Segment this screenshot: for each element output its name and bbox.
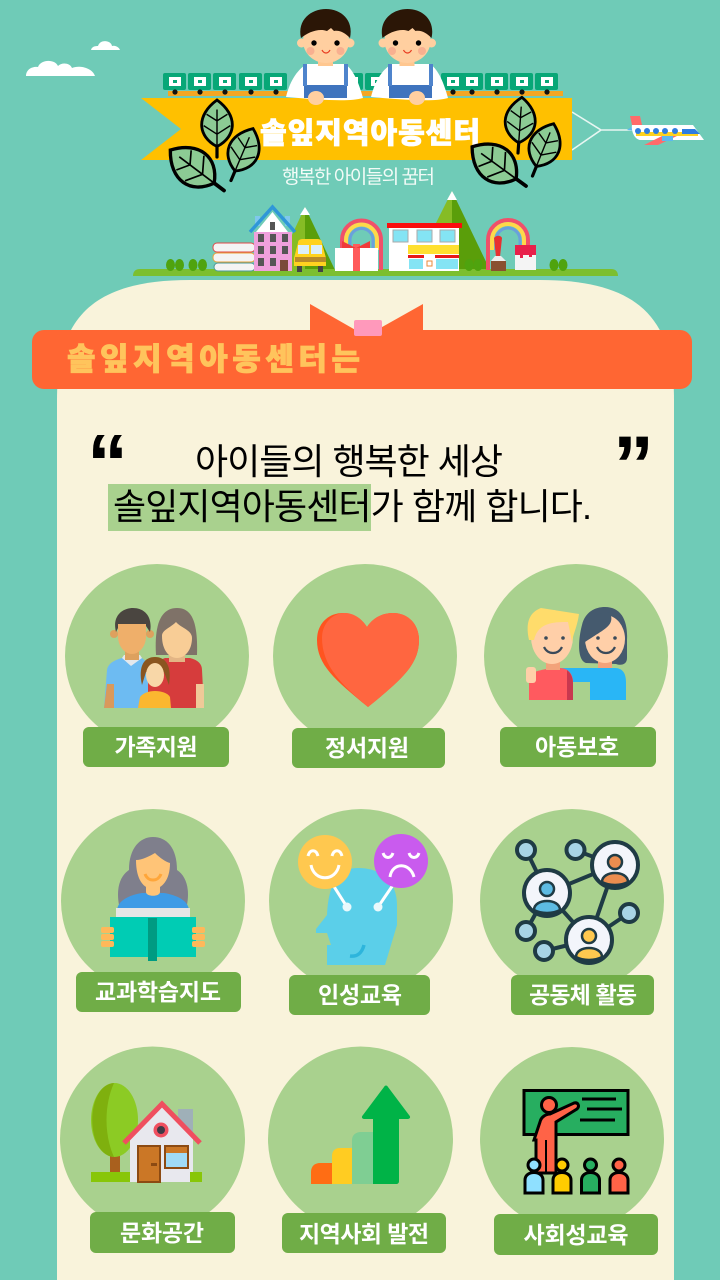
quote line 1: 아이들의 행복한 세상 [195,441,503,482]
label box [500,727,656,767]
label box [76,972,241,1012]
sad face [374,834,428,888]
school building [387,223,462,271]
leaves right [462,96,568,200]
item: community activity [480,809,664,1015]
icon: two friends [526,607,627,700]
ground [133,269,618,276]
label box [90,1212,235,1253]
quote line 2: 솔잎지역아동센터가 함께 합니다. [113,486,592,527]
label box [282,1213,446,1253]
label: 문화공간 [120,1220,204,1246]
ribbon title: 솔잎지역아동센터 [260,117,480,150]
big mountain [430,191,490,270]
books [213,243,255,271]
icon: reader with book [101,837,205,961]
label: 사회성교육 [524,1222,628,1248]
item: social education [480,1047,664,1255]
label: 공동체 활동 [529,982,637,1008]
icon: head with emotions [298,834,428,965]
train [163,73,563,96]
item: emotional support [273,564,457,768]
pink house [250,207,295,271]
highlight [108,484,371,531]
subtitle: 행복한 아이들의 꿈터 [282,166,435,188]
banner heading: 솔잎지역아동센터는 [67,342,360,377]
quote block [87,418,654,531]
village illustration [133,191,618,276]
two children [286,9,448,105]
leaves left [159,100,267,205]
happy face [298,835,352,889]
icon: growth chart [311,1086,410,1184]
label: 교과학습지도 [95,979,221,1005]
bow [310,304,423,336]
clouds [26,41,120,76]
label box [494,1214,658,1255]
item: character education [269,809,453,1015]
closing quote mark: ” [613,420,654,511]
icon: airplane [627,116,704,145]
icon: family [104,608,204,708]
label box [511,975,654,1015]
item: community development [268,1046,453,1253]
label: 정서지원 [325,735,409,761]
bow knot [354,320,382,336]
item: child protection [484,564,668,767]
label box [83,727,229,767]
rainbow and gift [335,220,381,271]
icon: teacher and pupils [524,1090,628,1193]
rainbow with brush and paint [488,220,536,271]
item: cultural space [60,1046,245,1253]
icon: heart [317,613,419,707]
ribbon with center name [141,98,572,160]
label: 인성교육 [318,982,402,1008]
bushes [166,259,568,271]
label: 지역사회 발전 [299,1221,429,1247]
item: family support [65,564,249,767]
label: 가족지원 [114,734,198,760]
icon: network [517,841,638,963]
icon: house and tree [91,1083,202,1182]
school bus [294,239,326,272]
small mountain [285,207,335,270]
label box [292,728,445,768]
label box [289,975,430,1015]
cream content panel [57,280,674,1280]
item: study guidance [61,809,245,1012]
opening quote mark: “ [87,418,128,509]
label: 아동보호 [535,734,619,760]
section banner [32,304,692,389]
connector lines to plane [572,112,632,150]
